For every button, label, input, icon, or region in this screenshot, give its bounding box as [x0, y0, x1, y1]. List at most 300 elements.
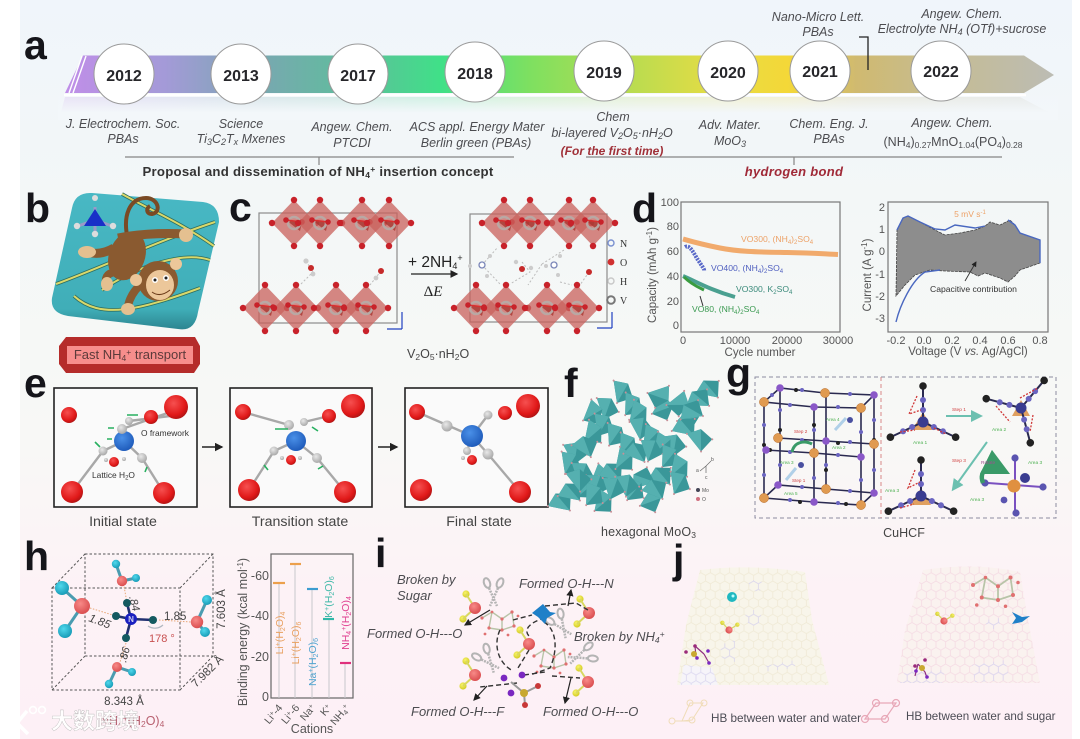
- publication 2022 upper: 4: [958, 27, 963, 37]
- bracket: hydrogen bond: [586, 157, 1002, 179]
- cluster formula: +: [123, 713, 128, 723]
- cluster cube: 1.85: [87, 613, 113, 632]
- capacity chart: SO: [767, 263, 780, 273]
- panel e: NH4 transport states: [24, 360, 548, 530]
- step and area labels: Area 3: [970, 497, 984, 503]
- label a: a: [24, 22, 48, 68]
- publication 2019: 5: [633, 131, 639, 141]
- caption hexagonal MoO3: 3: [691, 530, 696, 540]
- capacity chart: 10000: [720, 335, 750, 347]
- annotations: Broken by: [397, 572, 457, 587]
- CV chart: -1: [875, 269, 885, 281]
- capacity chart: 0: [680, 335, 686, 347]
- binding energy chart: +: [341, 627, 348, 631]
- banner: fast transport: +: [126, 347, 131, 357]
- binding energy chart: O): [307, 642, 319, 654]
- caption V2O5: ·nH: [435, 347, 455, 361]
- capacity chart: ): [647, 227, 659, 231]
- atom legend: V: [620, 296, 628, 307]
- cluster cube: [52, 554, 228, 708]
- publication 2019: (For the first time): [561, 144, 663, 158]
- binding energy chart: 0: [262, 690, 269, 704]
- step and area labels: Step 1: [952, 407, 966, 413]
- binding energy chart: Li: [262, 713, 277, 726]
- publication 2012: PBAs: [107, 132, 139, 146]
- publication 2022 lower: ): [1002, 135, 1006, 149]
- cluster formula: NH: [100, 714, 118, 728]
- capacity chart: 2: [740, 310, 744, 316]
- caption V2O5: 2: [455, 352, 460, 362]
- label e: e: [24, 360, 47, 406]
- annotations: [367, 572, 665, 719]
- reaction arrow: +: [457, 253, 463, 263]
- year 2021: 2021: [802, 64, 838, 81]
- initial state: 2: [125, 476, 129, 482]
- publication 2020: 3: [741, 139, 746, 149]
- axes and atom legend: a: [696, 468, 699, 474]
- binding energy chart: O): [340, 600, 352, 612]
- final state: [405, 388, 548, 507]
- publication 2021 lower: PBAs: [813, 132, 845, 146]
- year 2019: 2019: [586, 65, 622, 82]
- capacity chart: 80: [667, 221, 679, 233]
- binding energy chart: -20: [251, 650, 269, 664]
- publication 2019: O: [623, 126, 633, 140]
- axes and atom legend: Mo: [702, 488, 709, 494]
- lattice cube: Step 2: [794, 429, 808, 434]
- label f: f: [564, 360, 578, 406]
- capacity chart: 4: [758, 269, 762, 275]
- legend water-sugar: [862, 700, 1056, 723]
- binding energy chart: +: [291, 652, 298, 656]
- tile: [52, 193, 219, 329]
- right frame structure: [451, 197, 618, 334]
- binding energy chart: -60: [251, 569, 269, 583]
- cluster formula: 2: [141, 719, 146, 729]
- publication 2013: 2: [220, 137, 226, 147]
- binding energy chart: 4: [346, 596, 353, 600]
- cluster cube: 1.85: [164, 611, 186, 623]
- year 2013: 2013: [223, 68, 259, 85]
- binding energy chart: O): [290, 625, 302, 637]
- publication 2013: [197, 117, 285, 147]
- bracket: proposal: Proposal and dissemination of NH: [143, 164, 365, 179]
- binding energy chart: Na: [298, 705, 316, 723]
- publication 2022 lower: 4: [906, 140, 911, 150]
- year 2020: 2020: [710, 65, 746, 82]
- capacity chart: 100: [661, 197, 679, 209]
- publication 2013: T: [226, 132, 235, 146]
- publication 2019: Chem: [596, 110, 630, 124]
- annotations: 4: [655, 635, 660, 645]
- binding energy chart: 2: [296, 637, 303, 641]
- capacity chart: [645, 197, 853, 359]
- CV chart: 0.6: [1000, 335, 1016, 347]
- timeline arrow bar: [58, 56, 1058, 120]
- axes and atom legend: O: [702, 497, 706, 503]
- year 2018: [445, 42, 505, 102]
- binding energy chart: +: [307, 703, 315, 710]
- binding energy chart: +: [275, 642, 282, 646]
- water network sheet: [677, 567, 829, 685]
- binding energy chart: 4: [346, 631, 353, 635]
- CV chart: -3: [875, 313, 885, 325]
- year 2022: 2022: [923, 64, 959, 81]
- axes and atom legend: [696, 457, 714, 503]
- CV chart: 0.2: [944, 335, 960, 347]
- CV chart: 5 mV s: [954, 209, 981, 219]
- annotations: Formed O-H---O: [367, 626, 462, 641]
- binding energy chart: +: [285, 710, 293, 718]
- publication 2022 lower: 0.27: [915, 140, 931, 150]
- binding energy chart: Li: [274, 646, 286, 654]
- step and area labels: Area 3: [885, 488, 899, 494]
- publication 2017: [310, 120, 393, 150]
- cluster cube: 178 °: [149, 633, 175, 645]
- lattice cube: Area 2: [832, 445, 846, 450]
- caption V2O5: 5: [430, 352, 435, 362]
- year 2012: [94, 44, 154, 104]
- publication 2019: [551, 110, 673, 158]
- publication 2022 lower: ): [910, 135, 915, 149]
- CV chart: 0.4: [972, 335, 988, 347]
- publication 2022 upper: (OTf)+sucrose: [963, 22, 1046, 36]
- capacity chart: ): [737, 304, 740, 314]
- cluster cube: N: [128, 615, 134, 624]
- binding energy chart: O): [274, 615, 286, 627]
- publication 2012: [65, 117, 180, 146]
- bracket: proposal: 4: [365, 170, 370, 180]
- axes and atom legend: c: [705, 475, 708, 481]
- label c: c: [229, 184, 252, 230]
- binding energy chart: (H: [290, 641, 302, 652]
- cluster cube: 7.982 Å: [189, 653, 226, 690]
- label h: h: [24, 533, 49, 579]
- reaction arrow: [408, 253, 463, 300]
- annotation arrows: [465, 590, 571, 703]
- capacity chart: 2: [773, 290, 777, 296]
- binding energy chart: ): [236, 558, 250, 562]
- binding energy chart: +: [323, 703, 331, 710]
- cluster cube: 8.343 Å: [104, 695, 144, 708]
- binding energy chart: Li: [279, 713, 294, 726]
- molecule area 3: [883, 456, 959, 516]
- binding energy chart: NH: [340, 635, 352, 650]
- capacity chart: 4: [810, 240, 814, 246]
- cluster formula: 4: [118, 719, 123, 729]
- publication 2013: x: [233, 137, 239, 147]
- publication 2013: Mxenes: [238, 132, 285, 146]
- legend water-sugar: HB between water and sugar: [906, 710, 1056, 723]
- publication 2019: 2: [617, 131, 623, 141]
- publication 2022 upper: Electrolyte NH: [878, 22, 958, 36]
- binding energy chart: NH: [328, 708, 347, 728]
- CV chart: -1: [860, 242, 869, 249]
- sugar network sheet: [897, 566, 1040, 683]
- atom legend: O: [620, 258, 627, 269]
- year 2019: [574, 41, 634, 101]
- panel h: ammonium water cluster: [14, 533, 353, 736]
- publication 2021 upper: [772, 10, 864, 39]
- ammonium molecule: [74, 195, 116, 237]
- binding energy chart: 6: [313, 638, 320, 642]
- capacity chart: 4: [780, 269, 784, 275]
- arrow 2: [378, 446, 397, 448]
- arrow 1: [202, 446, 222, 448]
- publication 2021 lower: Chem. Eng. J.: [789, 117, 869, 131]
- publication 2020: [698, 118, 761, 149]
- panel g: CuHCF: [726, 350, 1056, 540]
- label b: b: [25, 185, 50, 231]
- label d: d: [632, 185, 657, 231]
- step and area labels: Area 3: [1028, 460, 1042, 466]
- capacity chart: Cycle number: [725, 347, 796, 359]
- capacity chart: ): [791, 234, 794, 244]
- publication 2020: MoO: [714, 134, 741, 148]
- capacity chart: VO300, K: [736, 284, 773, 294]
- year 2017: [328, 44, 388, 104]
- binding energy chart: Cations: [291, 722, 333, 736]
- panel j: hydrogen bond networks: [669, 536, 1056, 725]
- year 2020: [698, 41, 758, 101]
- publication 2022 upper: Angew. Chem.: [920, 7, 1003, 21]
- publication 2018: [409, 120, 545, 150]
- step and area labels: Area 1: [913, 440, 927, 446]
- molecules and bonds: [459, 577, 600, 708]
- CV chart: Current (A g: [862, 249, 874, 311]
- lattice cube: Area 3: [780, 460, 794, 465]
- capacity chart: SO: [797, 234, 810, 244]
- binding energy chart: -40: [251, 609, 269, 623]
- binding energy chart: 4: [343, 709, 350, 717]
- initial state: O: [128, 470, 135, 480]
- cluster cube: .86: [117, 645, 133, 664]
- caption V2O5: 2: [415, 352, 420, 362]
- binding energy chart: 2: [280, 627, 287, 631]
- binding energy chart: 6: [329, 576, 336, 580]
- molecule area 1: [885, 382, 961, 442]
- capacity chart: ): [761, 263, 764, 273]
- initial state: [54, 388, 197, 507]
- atom legend: N: [620, 239, 627, 250]
- capacity chart: 30000: [823, 335, 853, 347]
- caption CuHCF: CuHCF: [883, 526, 925, 540]
- banner: fast transport: 4: [122, 353, 127, 363]
- bracket: hydrogen bond: hydrogen bond: [745, 164, 844, 179]
- annotations: Formed O-H---N: [519, 576, 614, 591]
- banner: fast transport: [59, 337, 200, 373]
- year 2013: [211, 44, 271, 104]
- capacity chart: 4: [756, 310, 760, 316]
- cluster formula: (H: [128, 714, 141, 728]
- binding energy chart: Li: [290, 656, 302, 664]
- bracket connector: [859, 37, 868, 70]
- bracket: proposal: insertion concept: [375, 164, 494, 179]
- monkey: [78, 198, 193, 315]
- label j: j: [672, 536, 684, 582]
- state captions: [89, 514, 512, 530]
- publication 2021 lower: [789, 117, 869, 146]
- binding energy chart: +: [341, 703, 349, 710]
- publication 2018: Berlin green (PBAs): [421, 136, 531, 150]
- axes and atom legend: b: [711, 457, 714, 463]
- capacity chart: Capacity (mAh g: [647, 238, 659, 323]
- bracket: proposal: [125, 157, 514, 180]
- lattice cube: [759, 384, 879, 510]
- bracket: proposal: +: [370, 164, 375, 174]
- banner: fast transport: Fast NH: [74, 347, 122, 362]
- panel f: hexagonal MoO3: [543, 360, 727, 540]
- cluster formula: 4: [160, 719, 165, 729]
- label g: g: [726, 350, 751, 396]
- binding energy chart: O): [323, 580, 335, 592]
- CV chart: -1: [981, 210, 987, 216]
- initial state: O framework: [141, 428, 190, 438]
- reaction arrow: 4: [452, 261, 457, 271]
- annotations: +: [660, 629, 665, 639]
- publication 2013: Ti: [197, 132, 207, 146]
- caption hexagonal MoO3: hexagonal MoO: [601, 525, 691, 539]
- year 2018: 2018: [457, 66, 493, 83]
- binding energy chart: 2: [346, 612, 353, 616]
- publication 2022 lower: MnO: [931, 135, 959, 149]
- annotations: Broken by NH: [574, 629, 655, 644]
- caption V2O5: O: [459, 347, 469, 361]
- state captions: Final state: [446, 514, 512, 530]
- binding energy chart: (H: [340, 616, 352, 627]
- label i: i: [375, 530, 386, 576]
- capacity chart: 0: [673, 320, 679, 332]
- capacity chart: 4: [734, 310, 738, 316]
- publication 2013: Science: [219, 117, 263, 131]
- cluster cube: 7.603 Å: [215, 589, 228, 629]
- capacity chart: 20000: [772, 335, 802, 347]
- binding energy chart: Binding energy (kcal mol: [236, 569, 250, 706]
- binding energy chart: 6: [296, 621, 303, 625]
- binding energy chart: 2: [329, 592, 336, 596]
- CV chart: 2: [879, 202, 885, 214]
- year 2017: 2017: [340, 68, 376, 85]
- binding energy chart: Na: [307, 673, 319, 686]
- CV chart: Capacitive contribution: [930, 284, 1017, 294]
- publication 2012: J. Electrochem. Soc.: [65, 117, 180, 131]
- binding energy chart: (H: [307, 657, 319, 669]
- molecule area 2: [982, 375, 1049, 447]
- state captions: Initial state: [89, 514, 157, 530]
- CV chart: -0.2: [887, 335, 905, 347]
- binding energy chart: -6: [287, 702, 302, 717]
- binding energy chart: K: [318, 705, 332, 718]
- panel d: electrochemistry: [632, 185, 1048, 359]
- year 2022: [911, 41, 971, 101]
- binding energy chart: -4: [270, 702, 285, 717]
- capacity chart: SO: [744, 304, 756, 314]
- CV chart: 0.8: [1032, 335, 1048, 347]
- annotations: Formed O-H---F: [411, 704, 505, 719]
- reaction arrow: ΔE: [424, 284, 442, 300]
- binding energy chart: +: [308, 669, 315, 673]
- atom legend: [607, 239, 628, 307]
- publication 2021 upper: PBAs: [802, 25, 834, 39]
- step and area labels: Area 2: [992, 427, 1006, 433]
- lattice cube: Area 5: [784, 491, 798, 496]
- publication 2022 lower: Angew. Chem.: [910, 116, 993, 130]
- publication 2020: Adv. Mater.: [698, 118, 761, 132]
- CV chart: 1: [879, 224, 885, 236]
- publication 2022 lower: 1.04: [958, 140, 975, 150]
- banner: fast transport: transport: [131, 347, 187, 362]
- capacity chart: 60: [667, 246, 679, 258]
- CV chart: -2: [875, 291, 885, 303]
- capacity chart: VO80, (NH: [692, 304, 734, 314]
- caption V2O5: O: [420, 347, 430, 361]
- publication 2019: O: [663, 126, 673, 140]
- binding energy chart: (H: [274, 631, 286, 642]
- panel a: timeline: [24, 7, 1058, 180]
- step and area labels: [885, 407, 1042, 503]
- publication 2018: ACS appl. Energy Mater: [409, 120, 545, 134]
- capacity chart: 40: [667, 271, 679, 283]
- publication 2017: PTCDI: [333, 136, 371, 150]
- atom legend: H: [620, 277, 627, 288]
- publication 2022 lower: [884, 116, 1023, 150]
- capacity chart: 4: [789, 290, 793, 296]
- publication 2021 upper: Nano-Micro Lett.: [772, 10, 864, 24]
- CV chart: 0: [879, 246, 885, 258]
- capacity chart: 2: [764, 269, 768, 275]
- binding energy chart: [236, 554, 353, 736]
- binding energy chart: -1: [236, 562, 245, 569]
- binding energy chart: (H: [323, 596, 335, 607]
- panel i: hydrogen bond scheme: [367, 530, 665, 719]
- publication 2019: 2: [657, 131, 663, 141]
- publication 2019: bi-layered V: [551, 126, 618, 140]
- transition state: [230, 388, 372, 507]
- capacity chart: SO: [777, 284, 789, 294]
- cluster formula: O): [146, 714, 160, 728]
- CV chart: 0.0: [916, 335, 932, 347]
- crystal structure: [543, 373, 727, 520]
- capacity chart: VO400, (NH: [711, 263, 758, 273]
- step and area labels: Rotate: [981, 460, 995, 466]
- binding energy chart: +: [324, 607, 331, 611]
- annotations: Sugar: [397, 588, 432, 603]
- molecule rotated: [981, 454, 1047, 517]
- annotations: Formed O-H---O: [543, 704, 638, 719]
- publication 2017: Angew. Chem.: [310, 120, 393, 134]
- publication 2019: ·nH: [638, 126, 659, 140]
- publication 2022 upper: [878, 7, 1046, 37]
- capacity chart: VO300, (NH: [741, 234, 788, 244]
- binding energy chart: +: [268, 710, 276, 718]
- dashed frame: [755, 377, 1056, 518]
- publication 2013: 3: [207, 137, 212, 147]
- publication 2013: C: [212, 132, 222, 146]
- capacity chart: 2: [794, 240, 798, 246]
- initial state: Lattice H: [92, 470, 125, 480]
- legend water-water: HB between water and water: [711, 712, 861, 725]
- capacity chart: -1: [645, 230, 654, 238]
- lattice cube: Area 4: [826, 417, 840, 422]
- capacity chart: 4: [788, 240, 792, 246]
- reaction arrow: + 2NH: [408, 254, 452, 271]
- watermark: 大数跨境: [51, 704, 139, 736]
- vines: [56, 194, 215, 310]
- panel b: monkey tile: [25, 185, 219, 373]
- binding energy chart: K: [323, 611, 335, 618]
- capacity chart: 20: [667, 296, 679, 308]
- year 2021: [790, 41, 850, 101]
